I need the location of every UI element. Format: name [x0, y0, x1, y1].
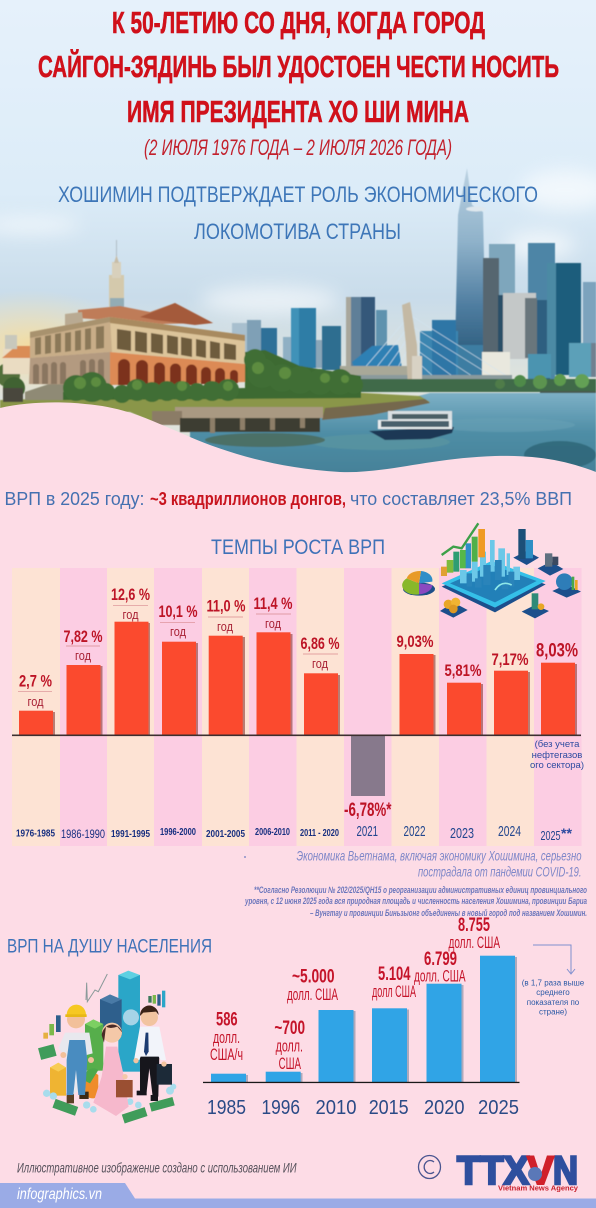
period labels: 2022 [404, 823, 426, 840]
year labels: 2015 [369, 1097, 409, 1119]
date subtitle: (2 ИЮЛЯ 1976 ГОДА – 2 ИЮЛЯ 2026 ГОДА) [144, 135, 452, 160]
period labels: 1986-1990 [61, 827, 105, 841]
GRDP 2025 statement: ~3 квадриллионов донгов, [150, 489, 346, 509]
period labels: 2021 [356, 823, 378, 840]
far bank [358, 379, 596, 392]
note: 1.7 times above average: (в 1,7 раза выше [522, 979, 585, 988]
period labels: 2006-2010 [255, 827, 290, 838]
value labels: долл. [276, 1037, 303, 1056]
value labels: год [217, 619, 233, 634]
value labels: долл США [372, 982, 416, 1001]
footnote: COVID-19 [244, 848, 582, 880]
right cluster [455, 168, 486, 352]
note: 1.7 times above average: среднего [536, 988, 570, 997]
subheading [58, 182, 538, 244]
TTXVN logo: TTX [457, 1149, 529, 1193]
icon: isometric city and charts [402, 523, 581, 618]
period labels: 2011 - 2020 [300, 828, 339, 839]
note: 1.7 times above average: стране) [539, 1008, 567, 1017]
value labels: год [265, 616, 281, 631]
illustration: people and charts [38, 971, 176, 1123]
left stairs and tree [25, 382, 65, 400]
year labels: 1996 [262, 1097, 300, 1119]
value labels [18, 585, 578, 821]
period labels: 2025 [540, 828, 560, 843]
value labels: 2,7 % [19, 672, 52, 691]
cable-stayed bridge [352, 345, 402, 372]
note: excluding oil and gas [530, 739, 584, 771]
value labels: 8,03% [536, 641, 578, 662]
value labels: год [122, 607, 139, 622]
roofs [78, 303, 213, 324]
period labels: 1976-1985 [16, 829, 55, 840]
note: excluding oil and gas: ого сектора) [530, 760, 584, 771]
value labels: 586 [216, 1010, 238, 1031]
period labels [16, 823, 573, 843]
heading: GRDP per capita: ВРП НА ДУШУ НАСЕЛЕНИЯ [7, 937, 212, 958]
boat [369, 427, 454, 440]
year labels: 2010 [316, 1097, 356, 1119]
value labels: 8.755 [458, 915, 490, 936]
period labels: ** [561, 825, 573, 841]
value labels: год [28, 694, 44, 709]
GRDP 2025 statement [4, 489, 572, 509]
value labels: -6,78%* [344, 800, 392, 821]
value labels: 6,86 % [300, 634, 340, 653]
bar chart: GRDP per capita [203, 915, 585, 1119]
value labels: США/ч [210, 1045, 243, 1064]
worker [67, 1093, 74, 1103]
period labels: 2023 [450, 825, 474, 842]
GRDP 2025 statement: что составляет 23,5% ВВП [350, 489, 572, 509]
heading: growth rate: ТЕМПЫ РОСТА ВРП [211, 536, 385, 559]
value labels: 9,03% [396, 632, 434, 651]
bars [211, 956, 517, 1082]
value labels: долл. [213, 1028, 240, 1047]
water [190, 393, 596, 480]
value labels: долл. США [448, 933, 500, 952]
chart column backgrounds [12, 568, 582, 846]
trees [63, 350, 361, 400]
value labels: 5,81% [444, 661, 482, 680]
year labels: 2025 [478, 1097, 519, 1119]
hero photo: Ho Chi Minh City skyline [0, 0, 596, 480]
value labels: 7,17% [492, 650, 528, 669]
value labels: 7,82 % [64, 627, 102, 646]
pink wave [0, 402, 596, 520]
TTXVN logo: N [553, 1149, 578, 1193]
far towers [232, 323, 248, 353]
value labels: 12,6 % [111, 585, 150, 604]
woman [93, 1047, 129, 1116]
period labels: 1991-1995 [111, 829, 150, 840]
TTXVN logo [457, 1149, 579, 1193]
value labels: год [170, 624, 186, 639]
note: 1.7 times above average [522, 979, 585, 1017]
GRDP 2025 statement: ВРП в 2025 году: [4, 489, 144, 509]
value labels: долл. США [287, 985, 338, 1004]
value labels: 11,4 % [254, 594, 292, 613]
value labels: 6.799 [424, 949, 457, 970]
value labels: США [279, 1054, 301, 1073]
value labels: 5.104 [378, 964, 411, 985]
value labels [210, 915, 500, 1073]
value labels: 11,0 % [206, 597, 246, 616]
title [38, 5, 559, 129]
value labels: 10,1 % [158, 602, 198, 621]
footer band [0, 1183, 596, 1208]
TTXVN logo: Vietnam News Agency [498, 1184, 579, 1193]
value labels: год [312, 656, 328, 671]
site name: infographics.vn [17, 1186, 102, 1203]
arrow to note [533, 945, 575, 974]
copyright symbol [418, 1156, 440, 1178]
axis [12, 734, 581, 736]
lawn and bank [0, 392, 430, 425]
TTXVN logo: V [527, 1149, 554, 1193]
axis [203, 1082, 520, 1083]
period labels: 2001-2005 [206, 829, 245, 840]
positive and negative bars [19, 622, 577, 796]
upper storey [30, 317, 245, 364]
footnote: resolution [244, 885, 587, 918]
colonial building: small left wing [3, 348, 31, 374]
year labels [207, 1097, 519, 1119]
year labels: 2020 [424, 1097, 464, 1119]
man [140, 1054, 159, 1097]
subheading: ЛОКОМОТИВА СТРАНЫ [194, 219, 401, 244]
upper openings [117, 329, 236, 360]
value labels: ~700 [274, 1018, 305, 1039]
arcade [29, 352, 112, 385]
note: excluding oil and gas: (без учета [535, 739, 580, 750]
value labels: долл. США [414, 967, 466, 986]
note: excluding oil and gas: нефтегазов [532, 750, 582, 761]
clock tower [109, 275, 124, 323]
value labels: год [75, 648, 91, 663]
pier [175, 407, 323, 418]
bar chart: growth rates [12, 585, 584, 843]
note: 1.7 times above average: показателя по [527, 998, 580, 1007]
year labels: 1985 [207, 1097, 246, 1119]
AI illustration credit: Иллюстративное изображение создано с использованием ИИ [17, 1160, 297, 1176]
period labels: 1996-2000 [160, 827, 196, 838]
period labels: 2024 [498, 823, 521, 840]
value labels: ~5.000 [292, 967, 334, 988]
